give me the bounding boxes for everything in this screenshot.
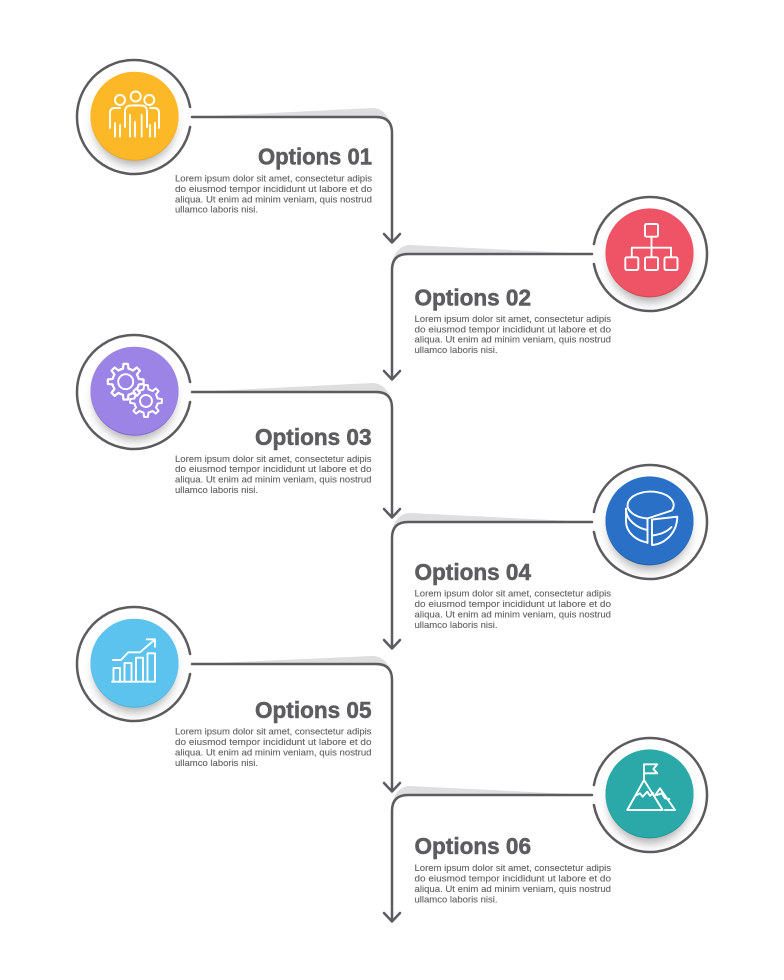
body text 06: do eiusmod tempor incididunt ut labore et do <box>414 874 611 884</box>
connector arrow 05 <box>192 664 400 792</box>
ring 05 <box>77 607 190 721</box>
body text 02: ullamco laboris nisi. <box>414 345 498 355</box>
badge shadow 03 <box>94 360 174 440</box>
body text 03: ullamco laboris nisi. <box>175 485 258 495</box>
body text 03 <box>175 454 372 495</box>
badge shadow 04 <box>610 490 690 570</box>
connector wedge shadow 03 <box>192 383 392 407</box>
icon: growth chart <box>112 639 155 682</box>
heading 05: Options 05 <box>255 697 372 723</box>
connector wedge shadow 06 <box>392 786 592 809</box>
ring 01 <box>77 60 190 174</box>
body text 02: do eiusmod tempor incididunt ut labore et do <box>414 324 611 334</box>
connector wedge shadow 02 <box>392 245 592 268</box>
connector arrow 06 <box>384 795 592 922</box>
body text 03: aliqua. Ut enim ad minim veniam, quis nostrud <box>175 474 372 484</box>
heading 06: Options 06 <box>414 833 531 859</box>
ring 04 <box>594 465 707 579</box>
body text 02: Lorem ipsum dolor sit amet, consectetur adipis <box>414 314 612 324</box>
body text 04 <box>414 588 612 630</box>
connector wedge shadow 05 <box>192 656 392 679</box>
icon: hierarchy <box>625 224 678 270</box>
badge 02 <box>606 208 694 297</box>
body text 06: ullamco laboris nisi. <box>414 894 498 904</box>
ring 02 <box>594 197 707 311</box>
body text 05: do eiusmod tempor incididunt ut labore et do <box>175 737 372 747</box>
icon: gears <box>108 364 162 417</box>
body text 02 <box>414 314 612 355</box>
body text 06: Lorem ipsum dolor sit amet, consectetur adipis <box>414 863 612 873</box>
badge 06 <box>606 749 694 838</box>
connector arrow 02 <box>384 254 592 380</box>
badge 04 <box>606 476 694 565</box>
badge 01 <box>90 72 178 161</box>
ring 03 <box>77 335 190 449</box>
body text 03: Lorem ipsum dolor sit amet, consectetur adipis <box>175 454 372 464</box>
body text 05: ullamco laboris nisi. <box>175 758 258 768</box>
step 04 <box>384 465 707 648</box>
body text 04: ullamco laboris nisi. <box>414 620 498 630</box>
icon: people <box>110 92 159 136</box>
heading 04: Options 04 <box>414 559 531 585</box>
body text 05: Lorem ipsum dolor sit amet, consectetur adipis <box>175 726 372 736</box>
icon: mountain flag <box>627 764 675 810</box>
body text 01: ullamco laboris nisi. <box>175 205 258 215</box>
badge shadow 05 <box>94 632 174 712</box>
body text 01: Lorem ipsum dolor sit amet, consectetur adipis <box>175 174 373 184</box>
body text 01: do eiusmod tempor incididunt ut labore et do <box>175 184 372 194</box>
connector wedge shadow 01 <box>192 108 392 132</box>
heading 01: Options 01 <box>258 144 372 170</box>
body text 05: aliqua. Ut enim ad minim veniam, quis nostrud <box>175 747 372 757</box>
body text 06 <box>414 863 612 904</box>
connector wedge shadow 04 <box>392 513 592 536</box>
heading 03: Options 03 <box>255 424 372 450</box>
connector arrow 01 <box>192 117 400 242</box>
body text 01 <box>175 174 373 215</box>
body text 01: aliqua. Ut enim ad minim veniam, quis nostrud <box>175 194 372 204</box>
badge shadow 01 <box>94 85 174 165</box>
ring 06 <box>594 738 707 852</box>
body text 04: do eiusmod tempor incididunt ut labore et do <box>414 599 611 609</box>
body text 03: do eiusmod tempor incididunt ut labore et do <box>175 464 372 474</box>
body text 05 <box>175 726 372 768</box>
step 06 <box>384 738 707 922</box>
badge 05 <box>90 619 178 708</box>
body text 04: Lorem ipsum dolor sit amet, consectetur adipis <box>414 588 612 598</box>
step 02 <box>384 197 707 380</box>
body text 06: aliqua. Ut enim ad minim veniam, quis nostrud <box>414 884 611 894</box>
heading 02: Options 02 <box>414 284 531 310</box>
icon: pie chart <box>626 492 677 545</box>
step 03 <box>77 335 400 518</box>
connector arrow 03 <box>192 392 400 518</box>
connector arrow 04 <box>384 522 592 648</box>
body text 02: aliqua. Ut enim ad minim veniam, quis nostrud <box>414 335 611 345</box>
step 01 <box>77 60 400 242</box>
badge 03 <box>90 347 178 436</box>
step 05 <box>77 607 400 792</box>
badge shadow 02 <box>610 222 690 302</box>
body text 04: aliqua. Ut enim ad minim veniam, quis nostrud <box>414 609 611 619</box>
badge shadow 06 <box>610 763 690 843</box>
